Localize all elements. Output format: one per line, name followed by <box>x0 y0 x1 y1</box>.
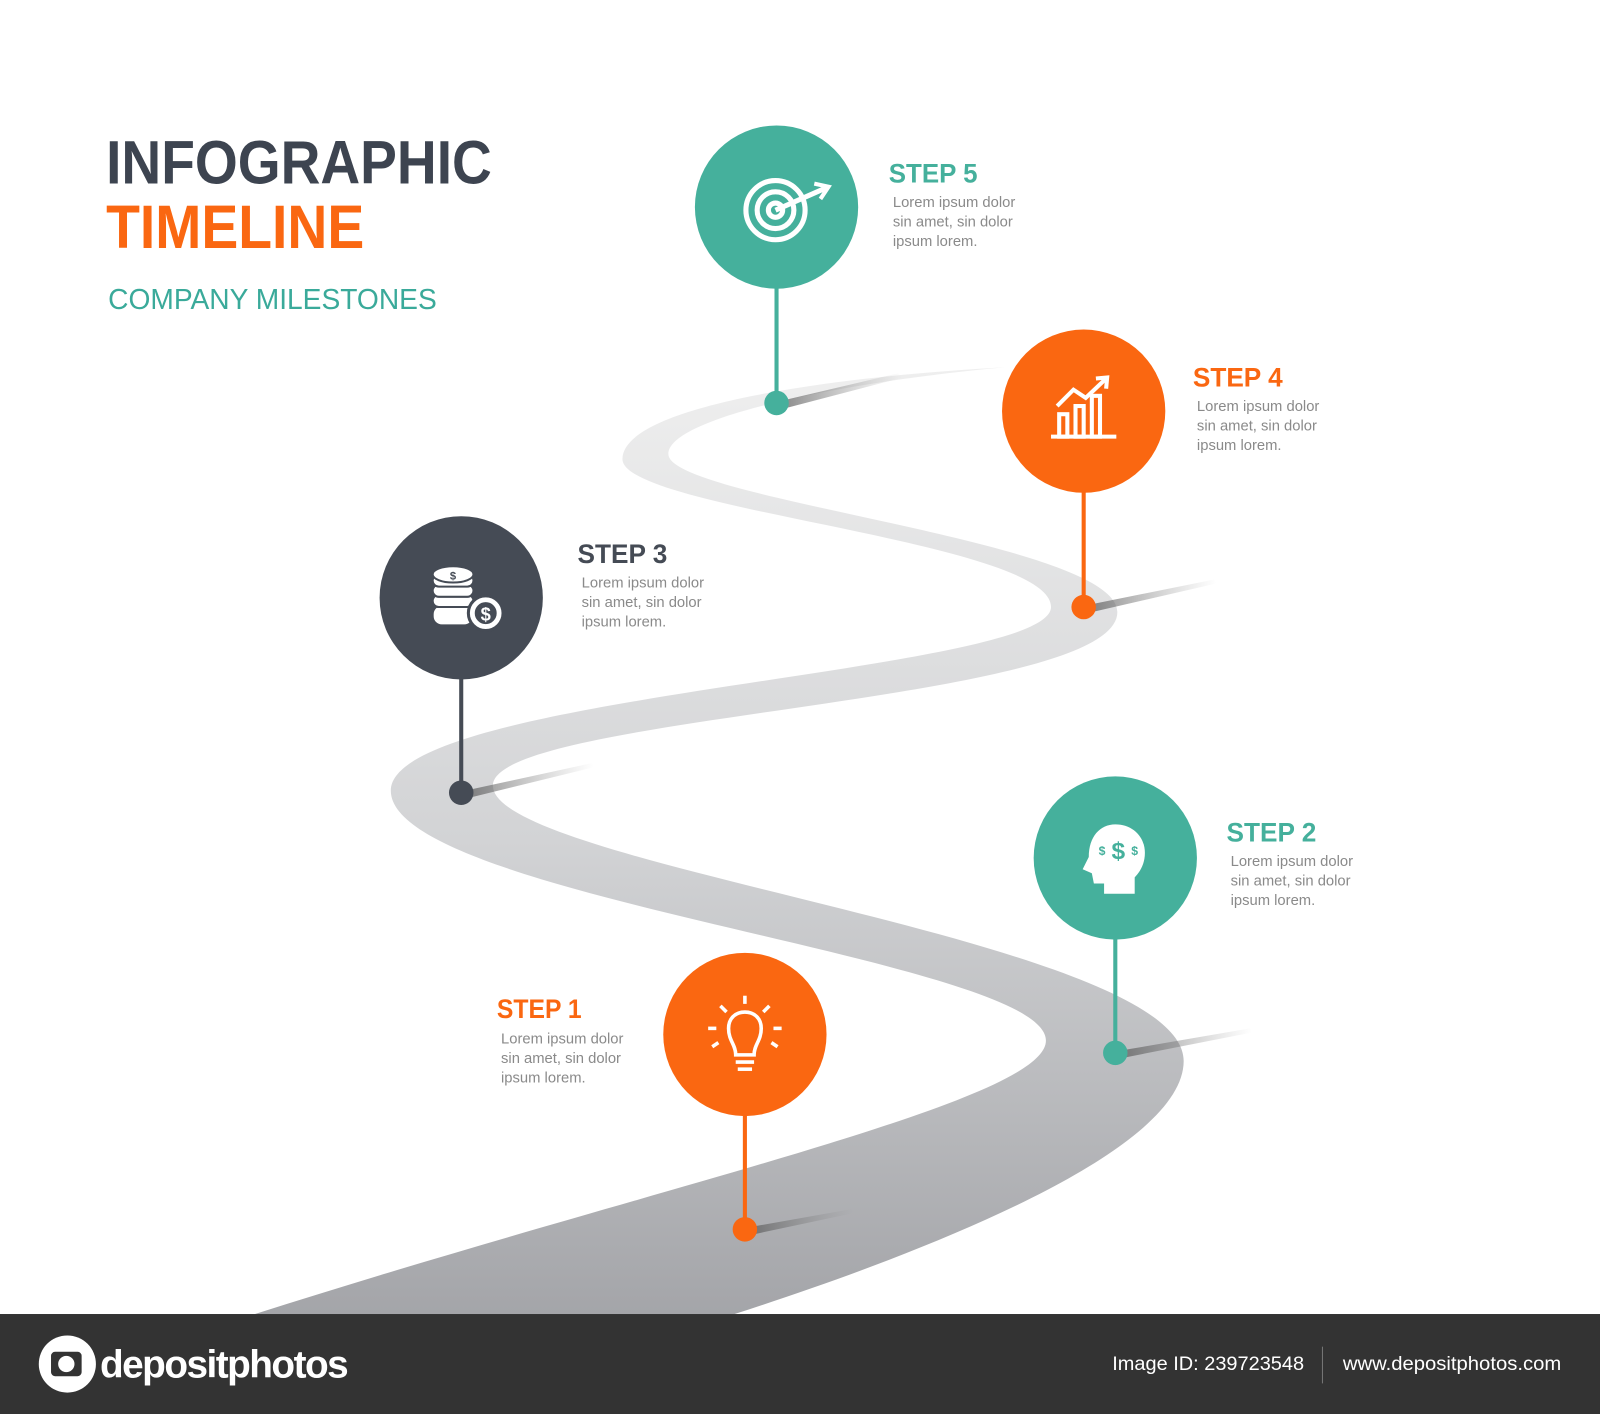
icon: chart <box>1051 377 1116 437</box>
footer logo <box>39 1335 347 1393</box>
step 5 text: STEP 5 <box>889 159 978 189</box>
icon: head with money: $ <box>1099 844 1106 858</box>
title: INFOGRAPHIC <box>106 129 492 197</box>
step 3 marker <box>380 516 543 805</box>
step 4 marker <box>1002 330 1165 619</box>
step 2 marker <box>1034 776 1197 1065</box>
footer info <box>1112 1347 1561 1383</box>
step 4 text: STEP 4 <box>1193 363 1283 393</box>
step 4 text <box>1193 363 1319 454</box>
step 1 text: STEP 1 <box>497 994 582 1024</box>
step 1 text: sin amet, sin dolor <box>501 1051 621 1067</box>
icon: head with money <box>1083 824 1145 894</box>
step 3 marker: $ <box>450 570 457 582</box>
step 5 marker <box>695 125 858 415</box>
icon: light bulb <box>708 996 782 1069</box>
step 1 text: Lorem ipsum dolor <box>501 1032 624 1048</box>
step 5 text: Lorem ipsum dolor <box>893 195 1015 211</box>
step 1 text <box>497 994 624 1086</box>
footer info: www.depositphotos.com <box>1342 1353 1561 1375</box>
step 5 text: sin amet, sin dolor <box>893 214 1013 230</box>
step 4 text: sin amet, sin dolor <box>1197 419 1317 435</box>
title: TIMELINE <box>106 193 364 261</box>
step 1 text: ipsum lorem. <box>501 1070 586 1086</box>
step 3 text: Lorem ipsum dolor <box>582 576 704 592</box>
subtitle: COMPANY MILESTONES <box>108 284 437 316</box>
icon: head with money: $ <box>1112 838 1126 865</box>
footer info: Image ID: 239723548 <box>1112 1353 1304 1375</box>
step 2 text: STEP 2 <box>1227 818 1316 848</box>
shadows <box>465 373 1252 1234</box>
title <box>106 129 492 261</box>
icon: coins <box>433 566 503 630</box>
step 4 text: Lorem ipsum dolor <box>1197 399 1319 415</box>
step 3 text <box>578 539 704 630</box>
step 2 text: Lorem ipsum dolor <box>1231 854 1353 870</box>
step 3 text: sin amet, sin dolor <box>582 595 702 611</box>
step 2 text: sin amet, sin dolor <box>1231 874 1351 890</box>
step 2 text <box>1227 818 1353 909</box>
road <box>255 367 1184 1314</box>
icon: target <box>746 181 829 240</box>
footer bar <box>0 1314 1600 1414</box>
step 2 text: ipsum lorem. <box>1231 893 1315 909</box>
footer logo: depositphotos <box>100 1343 347 1386</box>
step 3 text: STEP 3 <box>578 539 667 569</box>
step 3 text: ipsum lorem. <box>582 614 666 630</box>
icon: head with money: $ <box>1131 844 1138 858</box>
step 5 text: ipsum lorem. <box>893 234 977 250</box>
step 5 text <box>889 159 1015 250</box>
step 3 marker: $ <box>481 603 491 624</box>
step 4 text: ipsum lorem. <box>1197 438 1282 454</box>
step 1 marker <box>663 953 827 1242</box>
